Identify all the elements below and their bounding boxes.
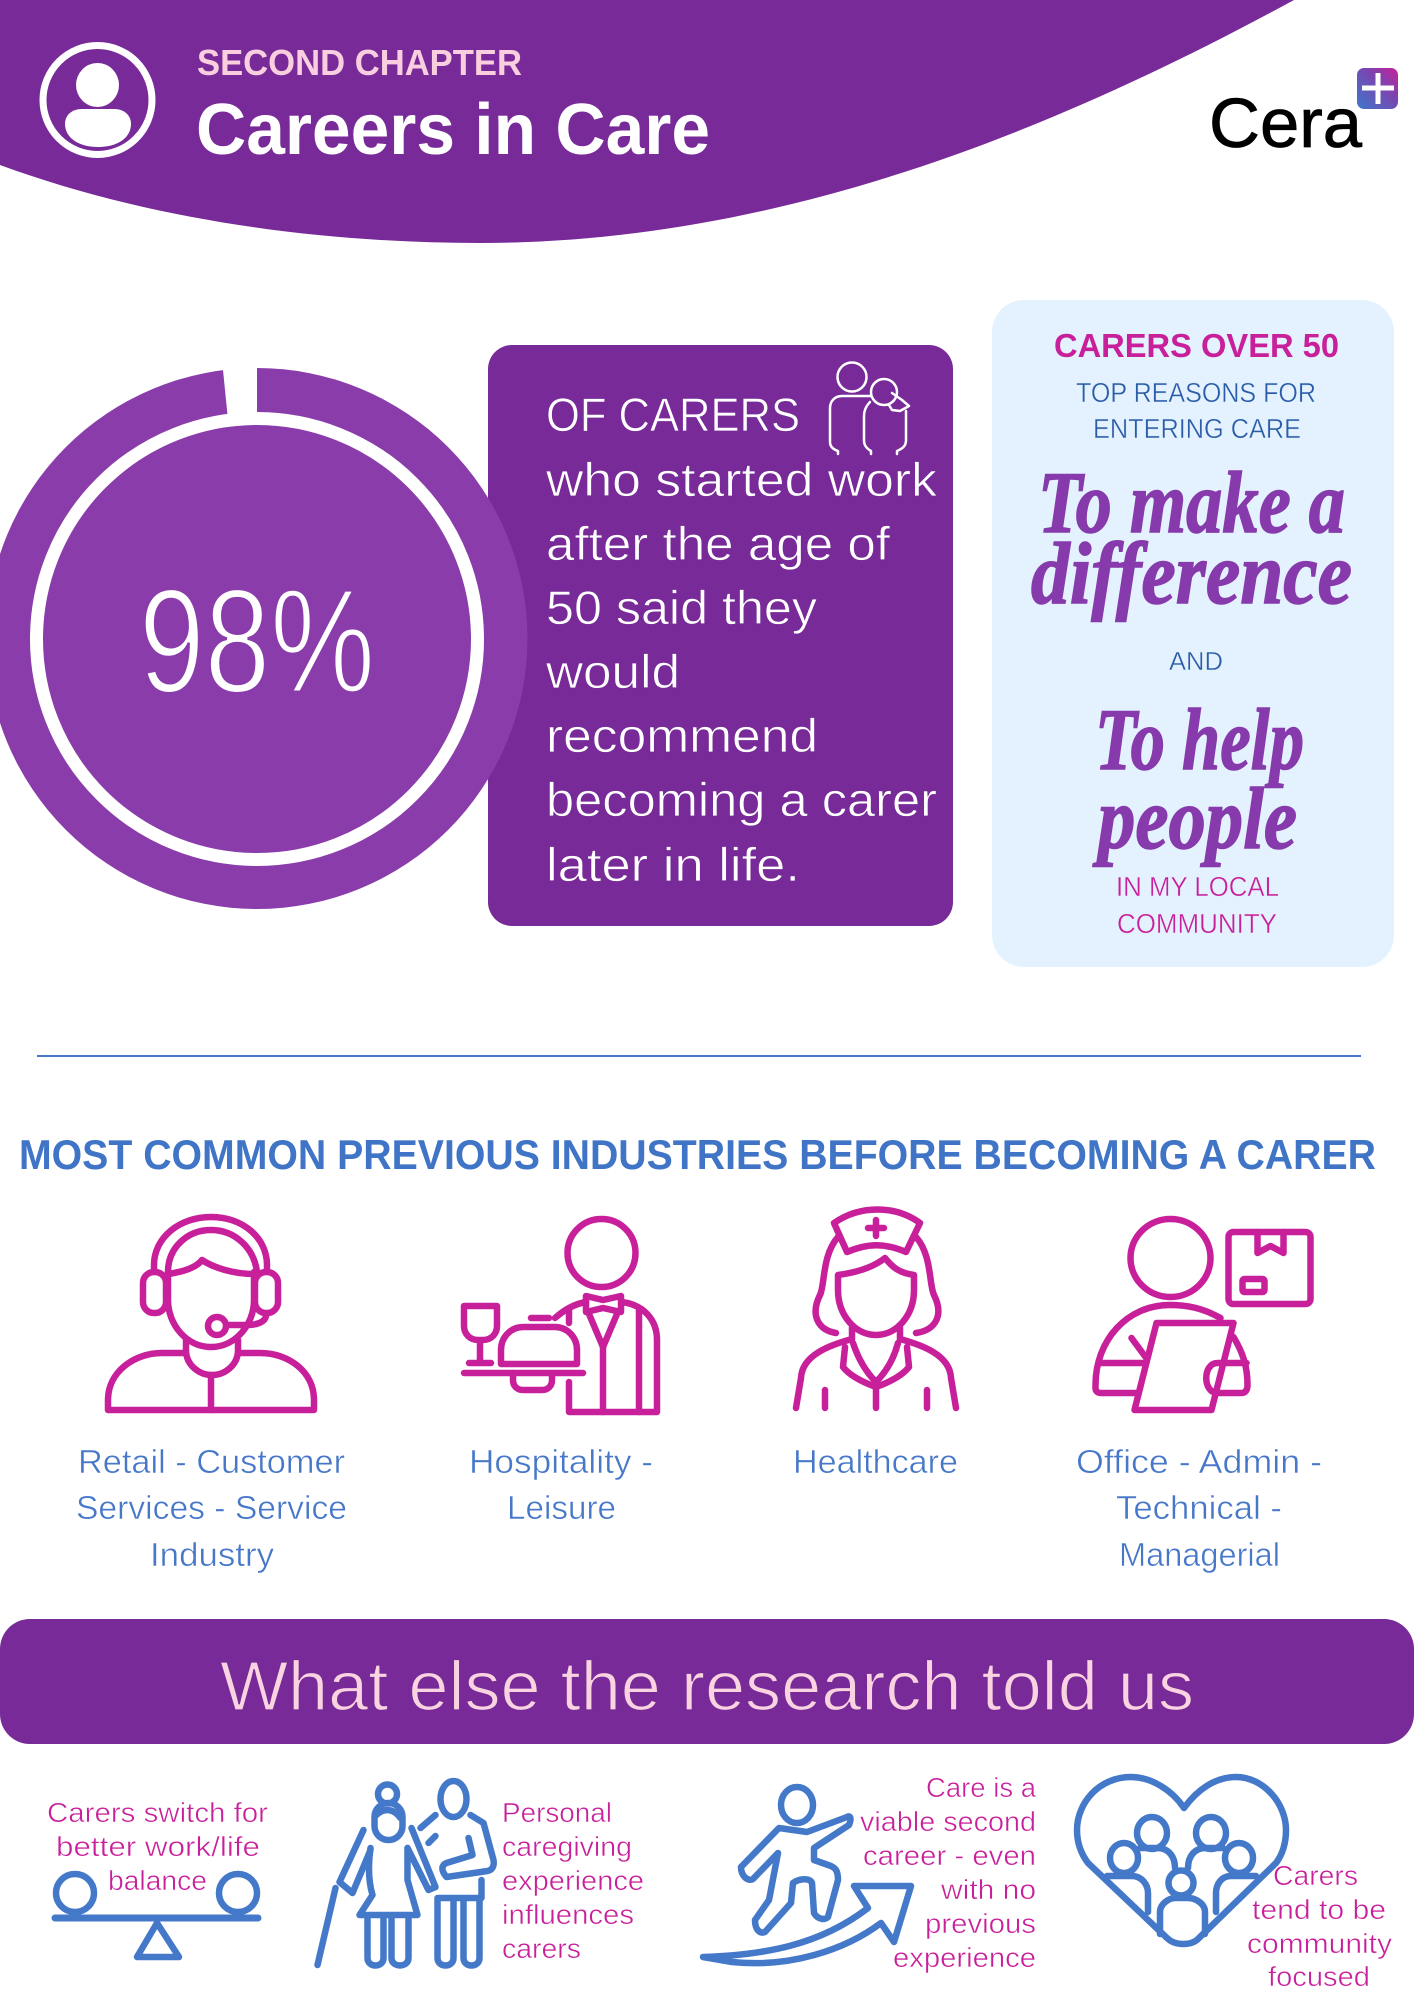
label: Healthcare [793, 1443, 958, 1480]
label: Managerial [1119, 1536, 1280, 1573]
statement text: OF CARERS [546, 388, 800, 441]
header banner [0, 0, 1294, 243]
big number: 98% [139, 559, 375, 724]
industry: healthcare [793, 1210, 958, 1480]
script: to help people [1092, 692, 1304, 868]
finding text: previous [925, 1908, 1036, 1939]
finding text [502, 1797, 644, 1964]
label [1076, 1443, 1322, 1573]
icon: carer and elderly woman [318, 1781, 494, 1966]
label: Hospitality - [469, 1443, 653, 1480]
script: to help people: To help [1095, 692, 1304, 789]
label: Office - Admin - [1076, 1443, 1322, 1480]
label [76, 1443, 347, 1573]
finding text: experience [893, 1942, 1036, 1973]
script: to help people: people [1092, 771, 1297, 868]
finding text: focused [1268, 1961, 1370, 1992]
label: Retail - Customer [78, 1443, 345, 1480]
script: to make a difference: To make a [1038, 455, 1345, 552]
panel: 98 percent statement [488, 345, 953, 926]
title: Careers in Care [196, 90, 710, 170]
statement text: recommend [546, 709, 818, 762]
icon: balance scale [55, 1874, 258, 1957]
icon: person stepping up arrow [703, 1787, 911, 1963]
finding text [47, 1797, 268, 1896]
finding text: with no [940, 1874, 1036, 1905]
label: Leisure [507, 1489, 616, 1526]
icon: two people [830, 362, 909, 454]
banner: what else the research told us: What else the research told us [220, 1647, 1194, 1725]
finding: work life balance [47, 1797, 268, 1957]
statement text: later in life. [546, 838, 800, 891]
label: Services - Service [76, 1489, 347, 1526]
finding text [1247, 1860, 1392, 1992]
statement text: would [545, 645, 680, 698]
finding text [860, 1772, 1036, 1973]
icon: worker with clipboard and parcel [1096, 1219, 1310, 1410]
in my local community: IN MY LOCAL [1116, 871, 1279, 902]
finding text: Carers [1273, 1860, 1358, 1891]
panel: carers over 50 [992, 300, 1394, 967]
statement text: becoming a carer [546, 773, 937, 826]
icon: waiter with tray [464, 1219, 657, 1412]
finding text: community [1247, 1928, 1392, 1959]
icon: headset agent [108, 1217, 314, 1410]
statement text: after the age of [546, 517, 891, 570]
finding text: Personal [502, 1797, 612, 1828]
script: to make a difference [1031, 455, 1352, 623]
industry: retail customer services [76, 1217, 347, 1573]
finding text: viable second [860, 1806, 1036, 1837]
industry: hospitality leisure [464, 1219, 657, 1526]
finding text: balance [108, 1865, 207, 1896]
finding text: better work/life [56, 1831, 260, 1862]
and: AND [1169, 646, 1223, 676]
finding text: career - even [863, 1840, 1036, 1871]
label: Technical - [1116, 1489, 1282, 1526]
label: Industry [150, 1536, 275, 1573]
finding text: influences [502, 1899, 634, 1930]
panel subheading: TOP REASONS FOR [1076, 377, 1316, 408]
icon: nurse [796, 1210, 956, 1408]
in my local community: COMMUNITY [1117, 908, 1277, 939]
statement text: who started work [545, 453, 938, 506]
label [469, 1443, 653, 1526]
finding: personal caregiving [318, 1781, 644, 1966]
in my local community [1116, 871, 1279, 939]
icon: family in heart [1077, 1777, 1286, 1944]
finding text: caregiving [502, 1831, 632, 1862]
script: to make a difference: difference [1031, 526, 1352, 623]
banner: what else the research told us [0, 1619, 1414, 1744]
icon: person in circle [43, 46, 152, 154]
finding: viable second career [703, 1772, 1036, 1973]
chart: 98 percent donut [0, 360, 528, 909]
finding text: experience [502, 1865, 644, 1896]
logo: Cera [1209, 68, 1398, 162]
finding text: Carers switch for [47, 1797, 268, 1828]
industry: office admin [1076, 1219, 1322, 1573]
panel heading: CARERS OVER 50 [1054, 327, 1339, 364]
finding text: tend to be [1252, 1894, 1386, 1925]
finding: community focused [1077, 1777, 1392, 1992]
panel subheading [1076, 377, 1316, 444]
logo: Cera: Cera [1209, 84, 1362, 162]
finding text: carers [502, 1933, 581, 1964]
finding text: Care is a [926, 1772, 1036, 1803]
header eyebrow: SECOND CHAPTER [197, 42, 522, 83]
statement text [545, 388, 938, 891]
statement text: 50 said they [546, 581, 818, 634]
panel subheading: ENTERING CARE [1093, 413, 1301, 444]
